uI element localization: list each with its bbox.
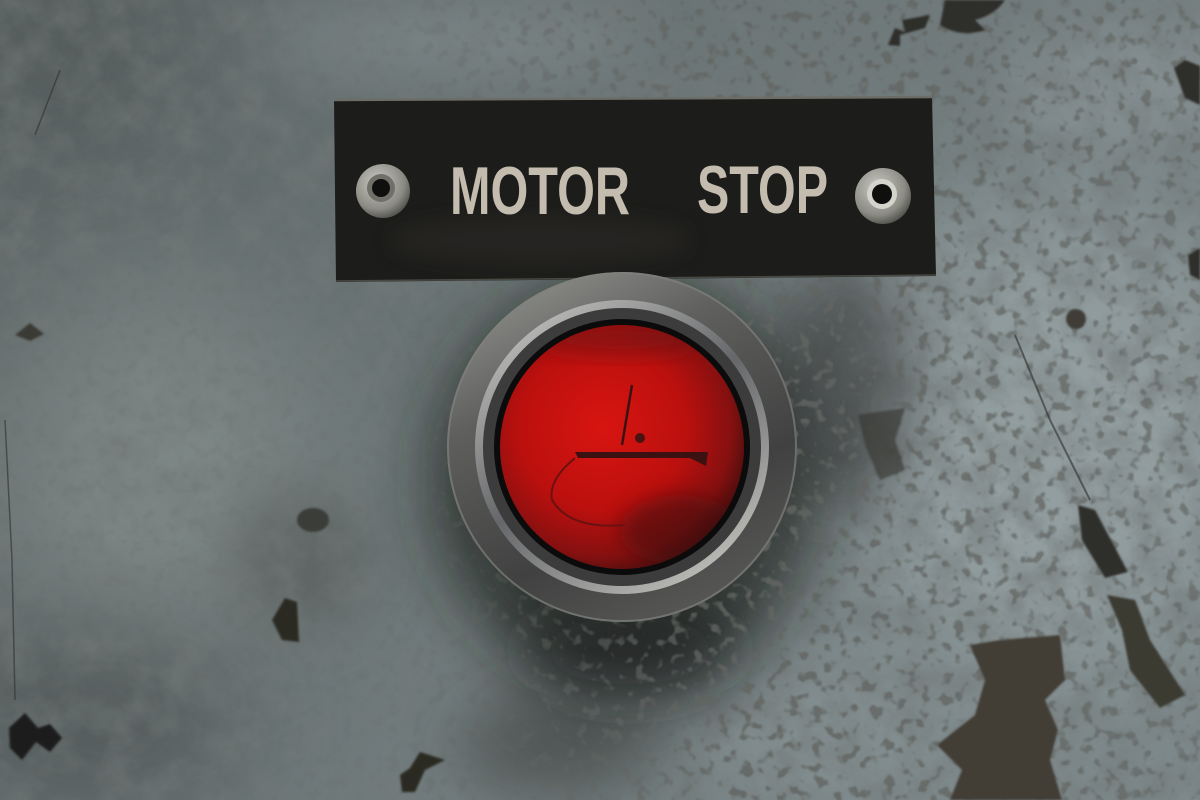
outer bezel bbox=[447, 272, 797, 622]
label: MOTOR: MOTOR bbox=[450, 153, 630, 229]
label: STOP: STOP bbox=[697, 152, 828, 228]
nameplate bbox=[334, 97, 936, 282]
inner ring bbox=[475, 300, 769, 594]
red push button bbox=[447, 272, 797, 622]
cap wear marks bbox=[546, 325, 725, 562]
grime halo around button bbox=[430, 270, 910, 795]
red cap bbox=[500, 325, 744, 569]
speckled corrosion bbox=[458, 0, 1200, 800]
left rivet bbox=[356, 164, 410, 218]
right rivet bbox=[855, 168, 911, 224]
